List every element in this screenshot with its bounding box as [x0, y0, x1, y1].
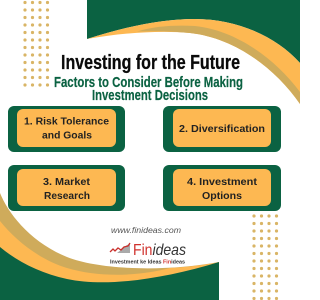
card 2: diversification: 2. Diversification	[179, 124, 265, 135]
card 4: investment options: 4. Investment	[187, 177, 258, 188]
website url: www.finideas.com	[111, 225, 181, 235]
title: Investing for the Future	[61, 52, 240, 74]
logo wordmark: Finideas	[133, 242, 186, 259]
card 4: investment options: Options	[202, 191, 242, 202]
card 3: market research: Research	[44, 191, 90, 202]
dot grid: top left	[23, 1, 49, 87]
card 1: risk tolerance and goals	[8, 106, 125, 152]
card 1: risk tolerance and goals: and Goals	[42, 130, 92, 142]
logo tagline: Investment ke Ideas Finideas	[110, 259, 185, 265]
card 1: risk tolerance and goals: 1. Risk Tolerance	[24, 116, 109, 128]
icon: rising chart	[110, 243, 130, 253]
dot grid: bottom right	[252, 214, 278, 300]
subtitle: Investment Decisions	[92, 87, 208, 104]
subtitle: Factors to Consider Before Making	[54, 74, 243, 91]
card 3: market research	[8, 165, 125, 211]
bottom-left green corner shape	[0, 193, 219, 300]
logo: finideas	[110, 242, 186, 265]
card 3: market research: 3. Market	[43, 177, 91, 188]
top-right green corner shape	[87, 0, 300, 104]
card 4: investment options	[163, 165, 281, 211]
subtitle	[54, 74, 243, 104]
card 2: diversification	[163, 106, 281, 152]
